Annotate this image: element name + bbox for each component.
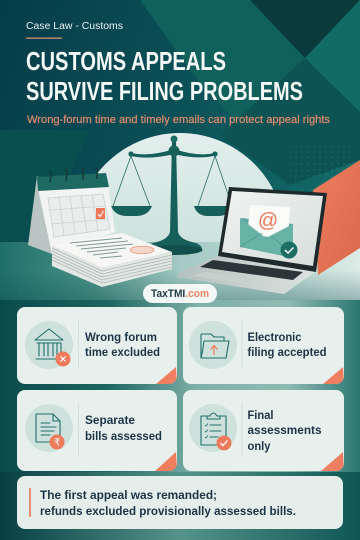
illustration: scales of justice [111, 136, 232, 255]
card: electronic filing: Electronic [248, 330, 302, 344]
card: electronic filing [183, 307, 344, 384]
card: final assessments: assessments [248, 423, 322, 437]
callout: appeal outcome: refunds excluded provisionally assessed bills. [40, 504, 296, 518]
title: CUSTOMS APPEALS [26, 46, 226, 76]
envelope [240, 205, 298, 258]
subtitle: Wrong-forum time and timely emails can protect appeal rights [27, 114, 330, 126]
card: wrong forum: time excluded [85, 345, 160, 359]
callout: appeal outcome [17, 476, 343, 529]
card: separate bills: Separate [85, 413, 135, 427]
card: final assessments: only [248, 439, 271, 453]
card: wrong forum [17, 307, 177, 384]
illustration: document stack [52, 233, 172, 287]
eyebrow label: Case Law - Customs [26, 21, 123, 32]
card: separate bills: bills assessed [85, 429, 162, 443]
envelope: @ [258, 210, 278, 232]
eyebrow rule [26, 38, 62, 39]
callout: appeal outcome: The first appeal was remanded; [40, 488, 217, 502]
title [26, 46, 303, 106]
brand badge: TaxTMI.com [151, 288, 209, 300]
icon: folder upload [189, 321, 237, 369]
illustration: desk calendar [28, 168, 115, 254]
icon: rupee document [25, 404, 73, 452]
icon: bank with cross [25, 321, 73, 369]
card: separate bills [17, 390, 177, 471]
card: final assessments [183, 390, 344, 471]
card: wrong forum: Wrong forum [85, 330, 157, 344]
illustration: laptop with email [176, 187, 327, 294]
card: final assessments: Final [248, 408, 274, 422]
icon: checklist [189, 404, 237, 452]
icon: rupee document: ₹ [54, 438, 60, 448]
card: electronic filing: filing accepted [248, 345, 326, 359]
brand badge [143, 284, 217, 303]
